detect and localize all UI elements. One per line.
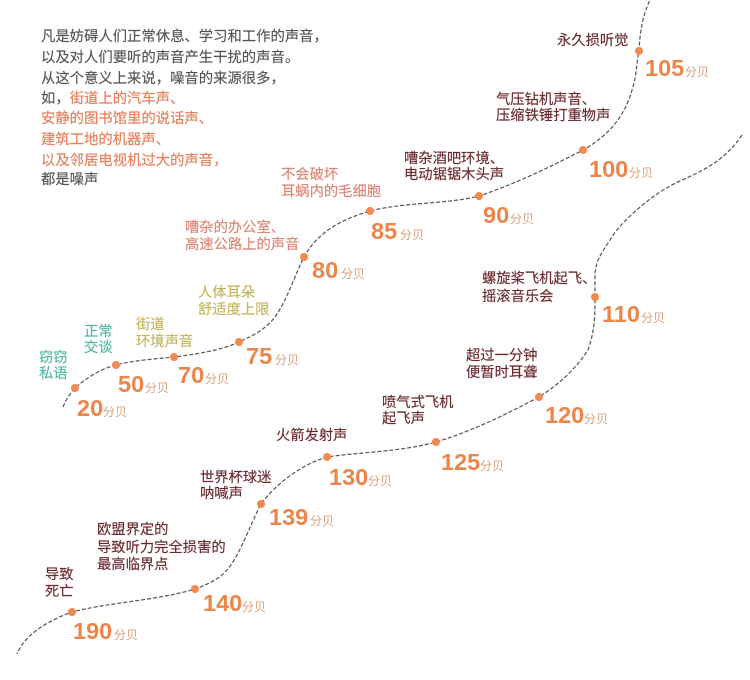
- marker: 125 dB jet: 125: [441, 449, 480, 475]
- marker: 139 dB world cup: 139: [269, 504, 308, 530]
- marker: 20 dB whisper: 私语: [39, 365, 68, 382]
- intro text block: [41, 27, 328, 188]
- marker: 125 dB jet: 起飞声: [382, 409, 425, 427]
- marker: 190 dB death: 分贝: [114, 628, 138, 642]
- upper dashed curve: [63, 0, 650, 407]
- marker: 100 dB drill: 压缩铁锤打重物声: [496, 106, 610, 124]
- intro text block: 以及对人们要听的声音产生干扰的声音。: [41, 48, 299, 66]
- marker: 20 dB whisper: 20: [77, 395, 103, 421]
- marker: 110 dB propeller: 螺旋桨飞机起飞、: [482, 270, 596, 287]
- marker: 130 dB rocket: 分贝: [368, 474, 392, 488]
- marker: 139 dB world cup: [200, 469, 334, 530]
- marker: 20 dB whisper: 窃窃: [39, 349, 68, 366]
- marker: 50 dB conversation: [84, 323, 169, 397]
- marker: 85 dB hair cells: 分贝: [400, 228, 424, 242]
- marker: 80 dB office: 嘈杂的办公室、: [185, 219, 285, 236]
- marker: 70 dB street: [136, 316, 229, 388]
- marker: 90 dB bar: 电动锯锯木头声: [404, 165, 504, 183]
- marker: 85 dB hair cells: 85: [371, 218, 397, 244]
- marker: 140 dB EU limit: 欧盟界定的: [97, 521, 168, 538]
- marker: 125 dB jet: 喷气式飞机: [382, 394, 453, 411]
- intro text block: 以及邻居电视机过大的声音，: [41, 151, 227, 169]
- marker: 70 dB street: 70: [178, 362, 204, 388]
- marker: 80 dB office: 分贝: [341, 267, 365, 281]
- marker: 70 dB street: 分贝: [205, 372, 229, 386]
- intro text block: 安静的图书馆里的说话声、: [41, 109, 213, 127]
- marker: 70 dB street: 环境声音: [136, 332, 193, 350]
- marker: 85 dB hair cells: 耳蜗内的毛细胞: [281, 183, 381, 200]
- marker: 100 dB drill: 气压钻机声音、: [496, 90, 596, 108]
- marker: 105 dB permanent loss: 105: [645, 55, 684, 81]
- marker: 75 dB comfort limit: 舒适度上限: [198, 301, 269, 318]
- marker: 140 dB EU limit: 导致听力完全损害的: [97, 538, 226, 556]
- marker: 140 dB EU limit: [97, 521, 266, 616]
- marker: 75 dB comfort limit: 分贝: [275, 353, 299, 367]
- marker: 110 dB propeller: 分贝: [641, 311, 665, 325]
- marker: 75 dB comfort limit: 人体耳朵: [198, 284, 255, 301]
- marker: 190 dB death: 导致: [45, 566, 74, 583]
- intro text block: 都是噪声: [41, 170, 98, 188]
- marker: 110 dB propeller: 摇滚音乐会: [482, 288, 553, 305]
- intro text block: 凡是妨碍人们正常休息、学习和工作的声音，: [41, 27, 328, 45]
- marker: 140 dB EU limit: 140: [203, 590, 242, 616]
- marker: 139 dB world cup: 世界杯球迷: [200, 469, 271, 486]
- marker: 130 dB rocket: 130: [329, 464, 368, 490]
- marker: 50 dB conversation: 分贝: [145, 381, 169, 395]
- marker: 110 dB propeller: [482, 270, 665, 327]
- marker: 139 dB world cup: 呐喊声: [200, 484, 243, 502]
- marker: 140 dB EU limit: 最高临界点: [97, 556, 168, 573]
- marker: 90 dB bar: 90: [483, 202, 509, 228]
- marker: 120 dB temporary deafness: 分贝: [584, 412, 608, 426]
- intro text block: 如，街道上的汽车声、: [41, 89, 184, 107]
- marker: 75 dB comfort limit: 75: [246, 343, 272, 369]
- marker: 190 dB death: [45, 566, 138, 644]
- marker: 90 dB bar: 分贝: [510, 212, 534, 226]
- marker: 75 dB comfort limit: [198, 284, 299, 369]
- marker: 125 dB jet: 分贝: [480, 459, 504, 473]
- marker: 70 dB street: 街道: [136, 316, 165, 333]
- lower dashed curve: [17, 135, 742, 654]
- marker: 20 dB whisper: 分贝: [103, 405, 127, 419]
- marker: 85 dB hair cells: [281, 166, 424, 244]
- marker: 85 dB hair cells: 不会破坏: [281, 166, 338, 183]
- marker: 120 dB temporary deafness: 便暂时耳聋: [466, 364, 537, 381]
- intro text block: 建筑工地的机器声、: [41, 130, 170, 148]
- marker: 190 dB death: 190: [73, 618, 112, 644]
- marker: 105 dB permanent loss: 永久损听觉: [557, 32, 628, 49]
- marker: 100 dB drill: 分贝: [629, 166, 653, 180]
- marker: 50 dB conversation: 50: [118, 371, 144, 397]
- marker: 90 dB bar: [404, 149, 534, 228]
- marker: 190 dB death: 死亡: [45, 583, 74, 600]
- marker: 125 dB jet: [382, 394, 504, 475]
- marker: 80 dB office: 高速公路上的声音: [185, 235, 299, 253]
- marker: 20 dB whisper: [39, 349, 127, 421]
- marker: 139 dB world cup: 分贝: [310, 514, 334, 528]
- marker: 50 dB conversation: 交谈: [84, 338, 113, 356]
- marker: 50 dB conversation: 正常: [84, 323, 113, 340]
- marker: 100 dB drill: [496, 90, 653, 182]
- marker: 105 dB permanent loss: 分贝: [685, 65, 709, 79]
- marker: 80 dB office: [185, 219, 365, 283]
- intro text block: 从这个意义上来说，噪音的来源很多，: [41, 69, 285, 87]
- marker: 90 dB bar: 嘈杂酒吧环境、: [404, 149, 504, 167]
- marker: 110 dB propeller: 110: [602, 301, 640, 327]
- marker: 130 dB rocket: [276, 426, 392, 490]
- marker: 120 dB temporary deafness: [466, 347, 608, 428]
- marker: 105 dB permanent loss: [557, 32, 709, 81]
- marker: 120 dB temporary deafness: 超过一分钟: [466, 347, 537, 364]
- marker: 120 dB temporary deafness: 120: [545, 402, 584, 428]
- marker: 140 dB EU limit: 分贝: [242, 600, 266, 614]
- marker: 80 dB office: 80: [312, 257, 338, 283]
- marker: 130 dB rocket: 火箭发射声: [276, 426, 347, 444]
- marker: 100 dB drill: 100: [589, 156, 628, 182]
